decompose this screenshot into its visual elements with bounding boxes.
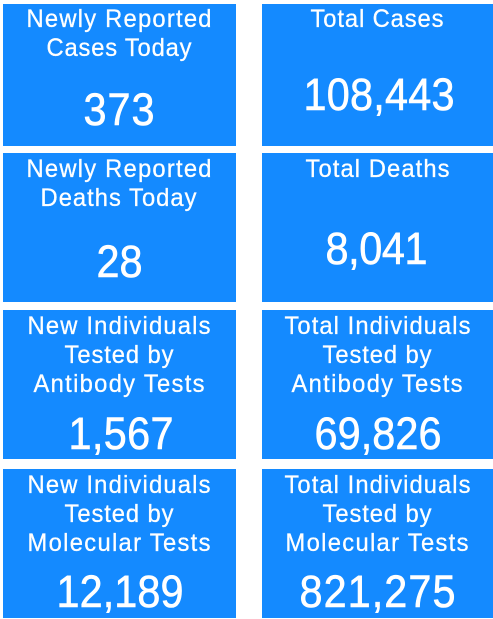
panel: total individuals tested by molecular tests: [262, 469, 493, 618]
panel: total individuals tested by antibody tests: 69,826: [315, 409, 441, 459]
panel: new individuals tested by molecular tests: Tested by: [65, 500, 174, 528]
panel: newly reported cases today: [3, 4, 236, 146]
panel: new individuals tested by antibody tests: 1,567: [69, 409, 173, 459]
panel: total individuals tested by molecular tests: Tested by: [323, 500, 432, 528]
panel: new individuals tested by antibody tests: Antibody Tests: [33, 370, 205, 398]
panel: newly reported deaths today: [3, 153, 236, 302]
panel: total cases: Total Cases: [310, 5, 444, 33]
panel: total individuals tested by antibody tests: Tested by: [323, 341, 432, 369]
panel: new individuals tested by antibody tests: New Individuals: [28, 312, 210, 340]
panel: total individuals tested by antibody tests: [262, 310, 493, 459]
panel: newly reported cases today: 373: [83, 85, 155, 135]
panel: new individuals tested by antibody tests: [3, 310, 236, 459]
panel: new individuals tested by molecular tests: 12,189: [57, 567, 183, 617]
panel: newly reported deaths today: Deaths Today: [41, 184, 197, 212]
panel: total individuals tested by molecular tests: Total Individuals: [284, 471, 471, 499]
panel: total deaths: 8,041: [325, 224, 428, 274]
panel: total deaths: [262, 153, 493, 302]
panel: new individuals tested by antibody tests: Tested by: [65, 341, 174, 369]
panel: total individuals tested by antibody tests: Total Individuals: [284, 312, 471, 340]
panel: newly reported cases today: Cases Today: [47, 34, 192, 62]
panel: newly reported deaths today: 28: [96, 237, 143, 287]
panel: newly reported cases today: Newly Reported: [27, 5, 211, 33]
panel: new individuals tested by molecular tests: Molecular Tests: [28, 529, 210, 557]
panel: total individuals tested by molecular tests: 821,275: [299, 567, 456, 617]
panel: total cases: [262, 4, 493, 146]
panel: new individuals tested by molecular tests: [3, 469, 236, 618]
panel: newly reported deaths today: Newly Reported: [27, 155, 211, 183]
panel: total individuals tested by molecular tests: Molecular Tests: [286, 529, 468, 557]
panel: total individuals tested by antibody tests: Antibody Tests: [291, 370, 463, 398]
panel: new individuals tested by molecular tests: New Individuals: [28, 471, 210, 499]
panel: total cases: 108,443: [304, 70, 454, 120]
panel: total deaths: Total Deaths: [305, 155, 450, 183]
